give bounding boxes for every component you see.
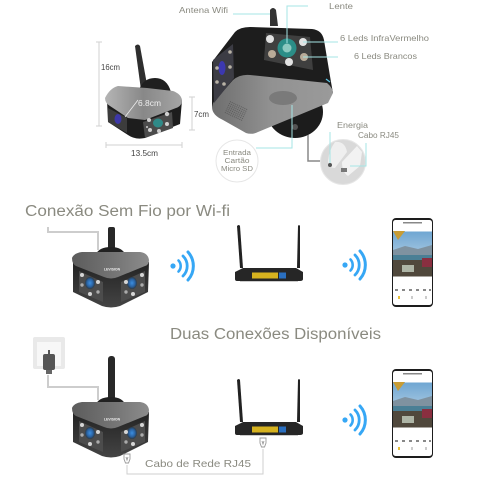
- callout: leds infravermelho: 6 Leds InfraVermelho: [340, 33, 429, 43]
- icon: power wire: [48, 227, 98, 250]
- callout: cables detail: Energia: [337, 120, 368, 130]
- dimension: height: 16cm: [101, 62, 120, 72]
- icon: camera: [72, 227, 149, 308]
- callout: leds infravermelho: [303, 33, 429, 43]
- callout: micro sd: Micro SD: [221, 166, 253, 173]
- icon: camera: LEVISION: [104, 418, 121, 422]
- callout: micro sd: Entrada: [223, 150, 251, 157]
- heading: wifi connection: Conexão Sem Fio por Wi-fi: [25, 203, 230, 220]
- panel: wifi connection diagram: [48, 218, 433, 308]
- callout: antena wifi: Antena Wifi: [179, 5, 228, 15]
- callout: antena wifi: [179, 5, 270, 15]
- icon: wall socket and plug: [33, 337, 65, 374]
- icon: power wire: [48, 375, 98, 400]
- callout: lente: [287, 1, 353, 43]
- icon: router: [235, 379, 303, 436]
- callout: cables detail: [308, 120, 400, 184]
- dimension: width: 13.5cm: [131, 148, 158, 158]
- callout: leds brancos: 6 Leds Brancos: [354, 51, 417, 61]
- icon: phone: [392, 218, 433, 307]
- cable: rj45: Cabo de Rede RJ45: [145, 458, 251, 470]
- icon: small camera: [105, 44, 182, 139]
- icon: wifi signal: [170, 252, 193, 280]
- callout: micro sd: Cartão: [224, 158, 250, 165]
- panel: product dimensions: [96, 42, 209, 158]
- cable: rj45: [124, 438, 266, 474]
- dimension: side height: 7cm: [194, 109, 209, 119]
- icon: wifi signal: [342, 251, 365, 279]
- panel: large camera with callouts: [179, 1, 429, 184]
- callout: cables detail: Cabo RJ45: [358, 131, 400, 140]
- icon: camera: LEVISION: [104, 268, 121, 272]
- callout: lente: Lente: [329, 1, 353, 11]
- callout: leds brancos: [303, 51, 417, 61]
- dimension: depth: 6.8cm: [138, 98, 161, 108]
- panel: wired connection diagram: [33, 337, 433, 474]
- icon: router: [235, 225, 303, 282]
- icon: camera: [72, 356, 149, 458]
- icon: wifi signal: [342, 406, 365, 434]
- callout: micro sd: [216, 105, 292, 182]
- icon: large camera: [212, 8, 333, 138]
- icon: phone: [392, 369, 433, 458]
- heading: two connections: Duas Conexões Disponíveis: [170, 326, 381, 343]
